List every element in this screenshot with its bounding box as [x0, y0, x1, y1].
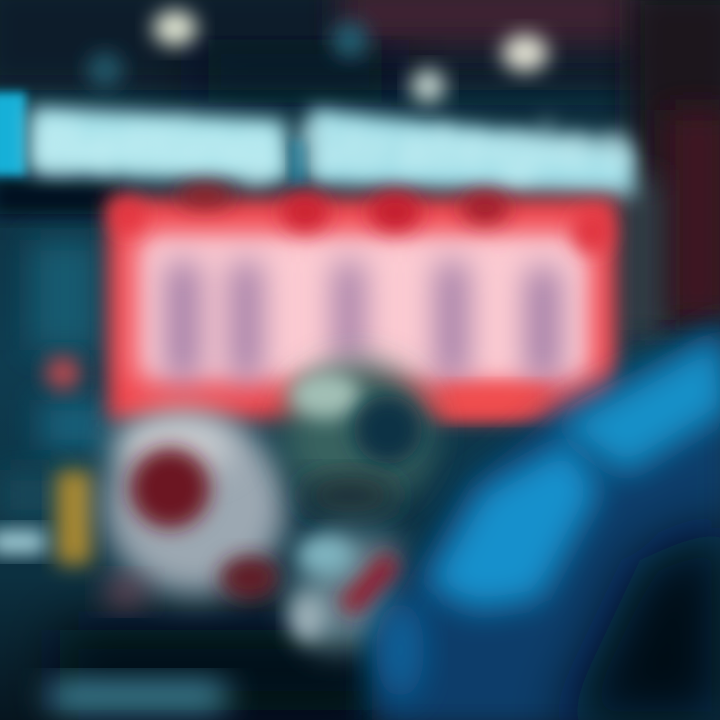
- table top markers: [112, 184, 612, 254]
- betting table panel: [108, 184, 616, 420]
- title band: [0, 92, 637, 196]
- table columns: [168, 262, 558, 380]
- football left: [103, 415, 287, 605]
- blue player: [372, 320, 720, 720]
- red chip: [45, 356, 81, 390]
- left glow bar: [0, 530, 46, 554]
- table bottom edge: [440, 388, 550, 416]
- boot: [285, 530, 405, 650]
- title: Betting Strategies: [35, 109, 635, 185]
- football right: [282, 362, 434, 513]
- bottom caption bar: [48, 682, 228, 710]
- yellow bottle: [56, 470, 92, 565]
- ceiling lights: [87, 10, 548, 103]
